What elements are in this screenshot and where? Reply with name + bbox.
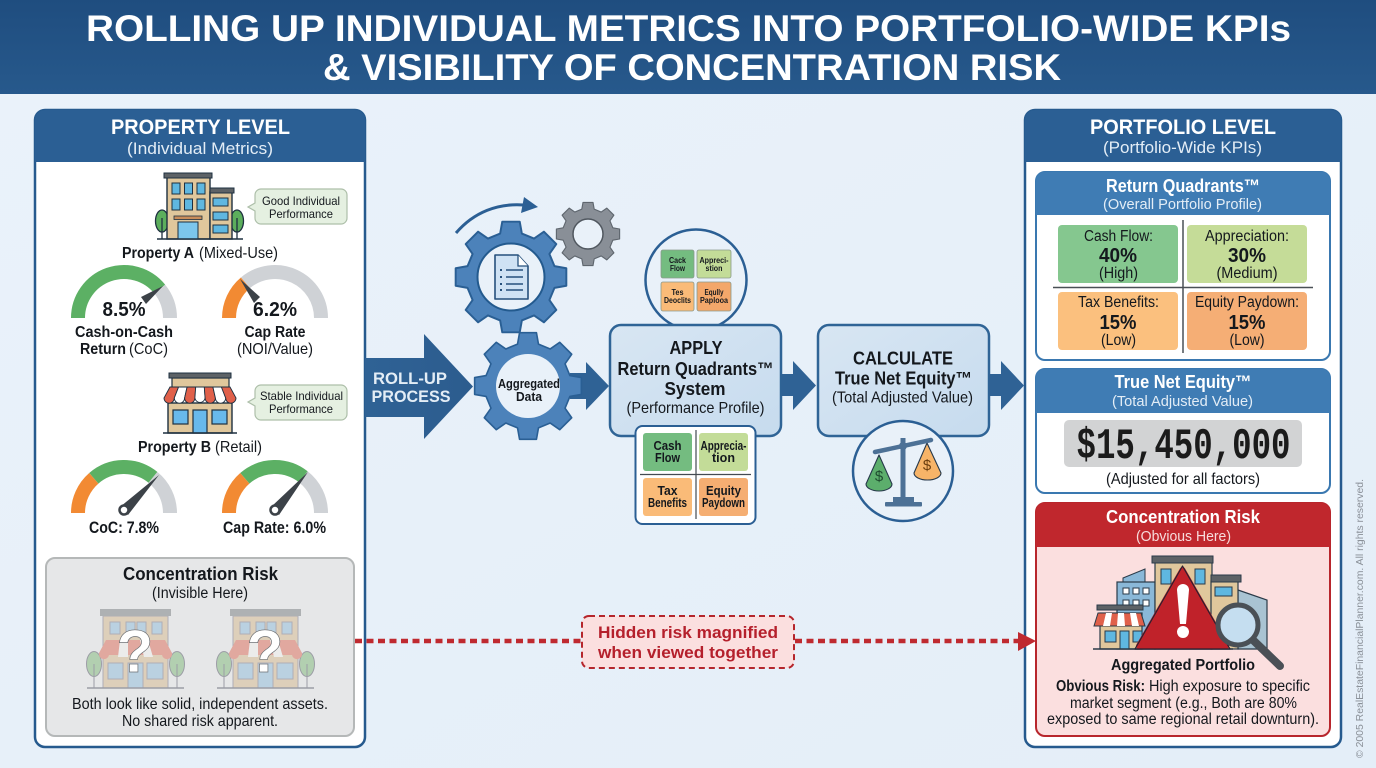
panel: quadrant card: Equity [706,484,741,498]
card: return quadrants: (Low) [1101,332,1136,349]
property level header: (Individual Metrics) [127,139,273,158]
panel: calculate true net equity [818,325,989,436]
icon: quadrant circle: Deoclits [664,296,691,305]
icon: quadrant circle: Tes [672,288,684,297]
callout: good individual performance: Performance [269,207,333,221]
callout: stable individual performance [248,385,347,420]
icon: balance scale: $ [923,457,932,474]
panel: portfolio level [1025,110,1341,747]
callout: stable individual performance: Performance [269,402,333,416]
panel: quadrant card: Apprecia- [700,439,746,453]
card: return quadrants [1036,172,1330,360]
icon: quadrant circle: Appreci- [700,256,729,265]
panel: calculate true net equity: (Total Adjusted Value) [832,390,973,406]
card: return quadrants: (Overall Portfolio Profile) [1103,196,1262,213]
panel: apply return quadrants: System [664,379,726,399]
icon: quadrant circle [646,230,746,330]
panel: concentration risk invisible: (Invisible Here) [152,585,248,602]
card: return quadrants: Cash Flow: [1084,228,1153,245]
icon: aggregated data gear: Aggregated [498,377,560,391]
gauge: cap rate: Cap Rate [244,324,306,341]
arrow: roll-up process [365,334,473,439]
arrow: calculate to portfolio [989,361,1024,410]
callout: hidden risk magnified: when viewed together [597,643,778,662]
icon: property B storefront [163,373,237,433]
arrow: apply to calculate [781,361,816,410]
gauge: cap rate: 6.2% [253,299,297,321]
icon: aggregated portfolio [1093,556,1280,666]
gauge: cash-on-cash return: Return [80,341,126,358]
portfolio level header: (Portfolio-Wide KPIs) [1103,138,1262,157]
gauge: cap rate: (NOI/Value) [237,341,313,358]
panel: quadrant card [636,426,756,524]
icon: ghost store 1: ? [117,618,153,685]
card: return quadrants: (Low) [1230,332,1264,349]
gauge: cap rate 6.0% [223,467,326,537]
card: return quadrants: 30% [1228,245,1266,267]
gauge: cap rate [229,272,321,358]
icon: balance scale: $ [875,468,884,485]
gauge: cap rate 6.0%: Cap Rate: 6.0% [223,519,326,537]
title banner: ROLLING UP INDIVIDUAL METRICS INTO PORTFOLIO-WIDE KPIs [86,8,1291,49]
property level header [35,110,365,162]
icon: balance scale [853,421,953,521]
callout: hidden risk magnified: Hidden risk magnified [598,623,778,642]
panel: apply return quadrants: (Performance Profile) [626,400,764,417]
card: return quadrants: (High) [1099,265,1138,282]
card: concentration risk obvious: Aggregated Portfolio [1111,657,1255,674]
icon: curved rotation arrow [456,197,538,233]
card: true net equity: True Net Equity™ [1114,372,1252,392]
panel: concentration risk invisible: Concentration Risk [123,564,279,584]
obvious risk text [1047,678,1319,728]
panel: quadrant card: Benefits [648,496,687,510]
panel: quadrant card: Flow [655,451,680,465]
card: return quadrants: 15% [1100,312,1137,334]
copyright note: © 2005 RealEstateFinancialPlanner.com. All rights reserved. [1354,479,1366,758]
card: true net equity: (Adjusted for all factors) [1106,471,1260,488]
panel: calculate true net equity: True Net Equity™ [835,368,972,388]
card: true net equity: $15,450,000 [1076,422,1290,472]
icon: quadrant circle: stion [706,264,723,273]
property A label [122,245,278,262]
panel: property level [35,110,365,747]
icon: quadrant circle: Flow [670,264,686,273]
card: return quadrants: Return Quadrants™ [1106,176,1260,196]
icon: quadrant circle: Cack [669,256,686,265]
property A label: Property A [122,245,194,262]
card: concentration risk obvious: (Obvious Here) [1136,528,1231,545]
title banner [0,0,1376,94]
panel: concentration risk invisible [46,558,354,736]
gauge: CoC 7.8%: CoC: 7.8% [89,519,159,537]
gauge: cash-on-cash return: Cash-on-Cash [75,324,173,341]
card: true net equity: (Total Adjusted Value) [1112,393,1253,410]
concentration risk invisible note: Both look like solid, independent assets. [72,696,328,713]
callout: good individual performance [248,189,347,224]
icon: aggregated data gear [475,333,581,439]
obvious risk text: Obvious Risk: [1056,678,1145,695]
property level header: PROPERTY LEVEL [111,116,290,139]
gauge: CoC 7.8% [78,467,170,537]
obvious risk text: exposed to same regional retail downturn). [1047,711,1319,728]
icon: gray gear [556,202,620,266]
concentration risk invisible note: No shared risk apparent. [122,713,278,730]
panel: calculate true net equity: CALCULATE [853,348,953,368]
callout: stable individual performance: Stable Individual [260,389,343,403]
icon: ghost store 1 [86,609,184,688]
property A label: (Mixed-Use) [199,245,278,262]
gauge: cash-on-cash return: (CoC) [129,341,168,358]
gauge: cash-on-cash return: 8.5% [102,299,146,321]
arrow: aggregated data to apply [570,362,609,410]
panel: quadrant card: Cash [654,439,682,453]
icon: ghost store 2: ? [247,618,283,685]
card: concentration risk obvious: Concentration Risk [1106,507,1261,527]
callout: good individual performance: Good Individual [262,194,340,208]
panel: quadrant card: Tax [658,484,678,498]
arrow: dashed hidden risk line [355,632,1036,651]
card: return quadrants: 40% [1099,245,1137,267]
icon: document gear [456,222,566,332]
card: return quadrants: 15% [1228,312,1266,334]
arrow: roll-up process: ROLL-UP [373,369,447,388]
title banner: & VISIBILITY OF CONCENTRATION RISK [323,47,1061,88]
card: return quadrants: (Medium) [1216,265,1278,282]
card: return quadrants: Equity Paydown: [1195,294,1299,311]
icon: ghost store 2 [216,609,314,688]
property B label: (Retail) [215,439,262,456]
gauge: cash-on-cash return [75,272,173,358]
panel: quadrant card: Paydown [702,496,745,510]
panel: apply return quadrants: Return Quadrants™ [618,359,774,379]
property B label [138,439,262,456]
card: concentration risk obvious [1036,503,1330,736]
panel: apply return quadrants: APPLY [670,338,722,358]
portfolio level header: PORTFOLIO LEVEL [1090,116,1276,139]
concentration risk invisible note [72,696,328,730]
property B label: Property B [138,439,211,456]
portfolio level header [1025,110,1341,162]
icon: quadrant circle: Eqully [704,288,724,297]
panel: quadrant card: tion [712,451,735,465]
card: true net equity [1036,369,1330,493]
icon: property A building [156,173,244,239]
card: return quadrants: Appreciation: [1205,228,1289,245]
card: return quadrants: Tax Benefits: [1078,294,1159,311]
callout: hidden risk magnified [582,616,794,668]
icon: quadrant circle: Paplooa [700,296,728,305]
arrow: roll-up process: PROCESS [372,387,450,406]
icon: aggregated data gear: Data [516,390,543,404]
obvious risk text: High exposure to specific [1149,678,1310,695]
obvious risk text: market segment (e.g., Both are 80% [1070,695,1297,712]
panel: apply return quadrants [610,325,781,436]
